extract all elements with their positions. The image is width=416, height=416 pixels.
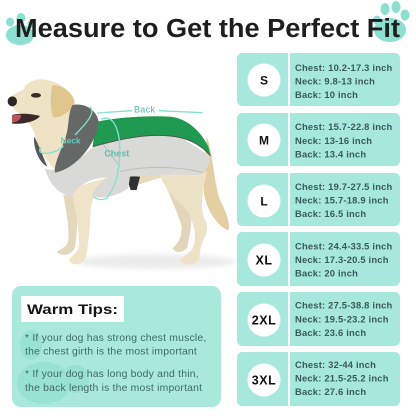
panel: size 3XL <box>237 352 400 406</box>
panel: size L: Chest: 19.7-27.5 inch <box>295 181 393 192</box>
panel: size 2XL: Back: 23.6 inch <box>295 327 366 338</box>
belly <box>128 172 167 185</box>
labels: Back <box>134 104 155 114</box>
panel: size M: Back: 13.4 inch <box>295 148 366 160</box>
panel: size S: Back: 10 inch <box>295 89 358 100</box>
tip 2: * If your dog has long body and thin, <box>25 369 199 380</box>
panel: size XL: Chest: 24.4-33.5 inch <box>295 240 393 252</box>
tip 1: * If your dog has strong chest muscle, <box>25 333 206 344</box>
nose, eye, mouth <box>8 96 17 106</box>
coat grey body <box>45 135 210 197</box>
measure lines <box>40 107 203 200</box>
panel: size XL: XL <box>256 254 272 268</box>
ear <box>51 85 75 117</box>
panel: size L: L <box>260 194 268 208</box>
panel: size L: Back: 16.5 inch <box>295 208 366 219</box>
coat green top <box>93 116 211 156</box>
panel: size S: Neck: 9.8-13 inch <box>295 76 375 86</box>
panel: size M: M <box>259 134 269 148</box>
heading: warm tips: Warm Tips: <box>27 301 118 317</box>
panel: size 3XL: Chest: 32-44 inch <box>295 359 376 370</box>
tail <box>204 137 229 231</box>
panel: size M: Chest: 15.7-22.8 inch <box>295 121 393 132</box>
illustration: dog wearing coat with measure lines <box>8 79 237 269</box>
panel: size S: S <box>260 74 268 88</box>
belly strap <box>126 176 140 190</box>
illustration: dog wearing coat with measure lines: Chest <box>104 149 129 159</box>
panel: size L: Neck: 15.7-18.9 inch <box>295 194 389 206</box>
panel: size S: Chest: 10.2-17.3 inch <box>295 62 393 73</box>
fur collar left side <box>34 137 47 167</box>
panel: size 3XL: 3XL <box>252 374 276 388</box>
panel: size 3XL: Neck: 21.5-25.2 inch <box>295 372 389 384</box>
coat seam <box>93 135 211 156</box>
panel: tips: the chest girth is the most important <box>25 346 197 358</box>
fur collar <box>55 105 99 173</box>
illustration: dog wearing coat with measure lines: Neck <box>61 135 81 145</box>
panel: size XL: Back: 20 inch <box>295 268 358 278</box>
panel: size 2XL: Neck: 19.5-23.2 inch <box>295 314 389 324</box>
panel: size 2XL: 2XL <box>252 314 276 328</box>
panel: size 2XL <box>237 292 400 346</box>
icon: right paw <box>373 1 410 42</box>
coat fold shadow <box>100 140 203 173</box>
panel: size L <box>237 173 400 226</box>
panel: size XL <box>237 232 400 286</box>
near front leg <box>69 176 112 264</box>
panel: size 2XL: Chest: 27.5-38.8 inch <box>295 300 393 310</box>
near back leg <box>160 172 207 265</box>
panel: size M <box>237 113 400 166</box>
panel: size S <box>237 53 400 106</box>
title: Measure to Get the Perfect Fit <box>15 15 401 43</box>
panel: size 3XL: Back: 27.6 inch <box>295 386 366 397</box>
ground shadow <box>77 254 237 269</box>
dog neck and head <box>10 79 73 170</box>
far front leg <box>57 195 78 255</box>
icon: paw watermark <box>17 330 89 404</box>
icon: left paw <box>6 13 34 45</box>
panel: size M: Neck: 13-16 inch <box>295 135 372 146</box>
white heading box <box>21 296 124 322</box>
panel: tips: the back length is the most important <box>25 383 202 394</box>
panel: tips <box>12 286 221 407</box>
panel: size XL: Neck: 17.3-20.5 inch <box>295 254 389 265</box>
far back leg <box>163 173 191 252</box>
